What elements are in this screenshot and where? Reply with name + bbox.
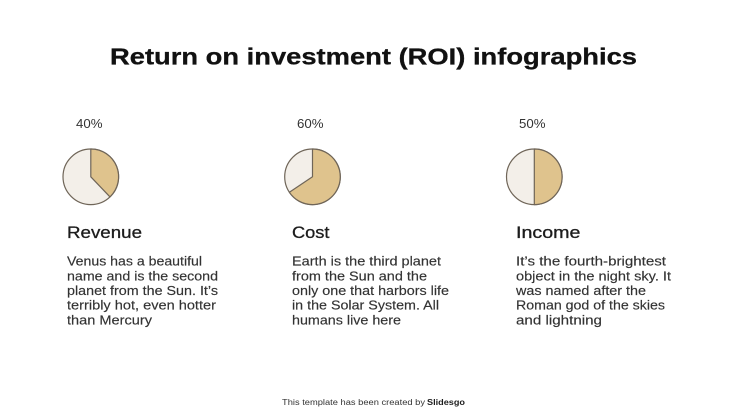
revenue description: terribly hot, even hotter xyxy=(67,299,216,313)
footer credit xyxy=(282,398,465,407)
cost percentage: 60% xyxy=(297,117,324,131)
cost description: humans live here xyxy=(292,313,401,327)
title: Return on investment (ROI) infographics xyxy=(110,43,637,69)
income description: Roman god of the skies xyxy=(516,299,665,313)
income pie chart xyxy=(506,149,562,205)
cost description: only one that harbors life xyxy=(292,284,449,298)
cost description xyxy=(292,255,449,327)
cost heading: Cost xyxy=(292,224,330,242)
cost description: in the Solar System. All xyxy=(292,299,439,313)
revenue description: planet from the Sun. It’s xyxy=(67,284,218,298)
revenue percentage: 40% xyxy=(76,117,102,131)
revenue description: name and is the second xyxy=(67,269,218,283)
income description: was named after the xyxy=(515,284,646,298)
revenue description: than Mercury xyxy=(67,313,153,327)
revenue pie chart xyxy=(63,149,119,205)
cost pie chart xyxy=(285,149,340,205)
panel: income xyxy=(506,117,672,327)
cost description: from the Sun and the xyxy=(292,269,427,283)
income percentage: 50% xyxy=(519,117,546,131)
panel: cost xyxy=(285,117,449,327)
panel: revenue xyxy=(63,117,218,327)
revenue description xyxy=(67,255,218,327)
footer credit: This template has been created by xyxy=(282,398,425,407)
income description xyxy=(515,255,672,327)
footer credit: Slidesgo xyxy=(427,398,465,407)
income description: and lightning xyxy=(516,313,602,327)
income description: It’s the fourth-brightest xyxy=(516,255,667,269)
revenue heading: Revenue xyxy=(67,224,142,242)
income description: object in the night sky. It xyxy=(516,269,672,283)
revenue description: Venus has a beautiful xyxy=(67,255,202,269)
income heading: Income xyxy=(516,224,580,242)
cost description: Earth is the third planet xyxy=(292,255,442,269)
